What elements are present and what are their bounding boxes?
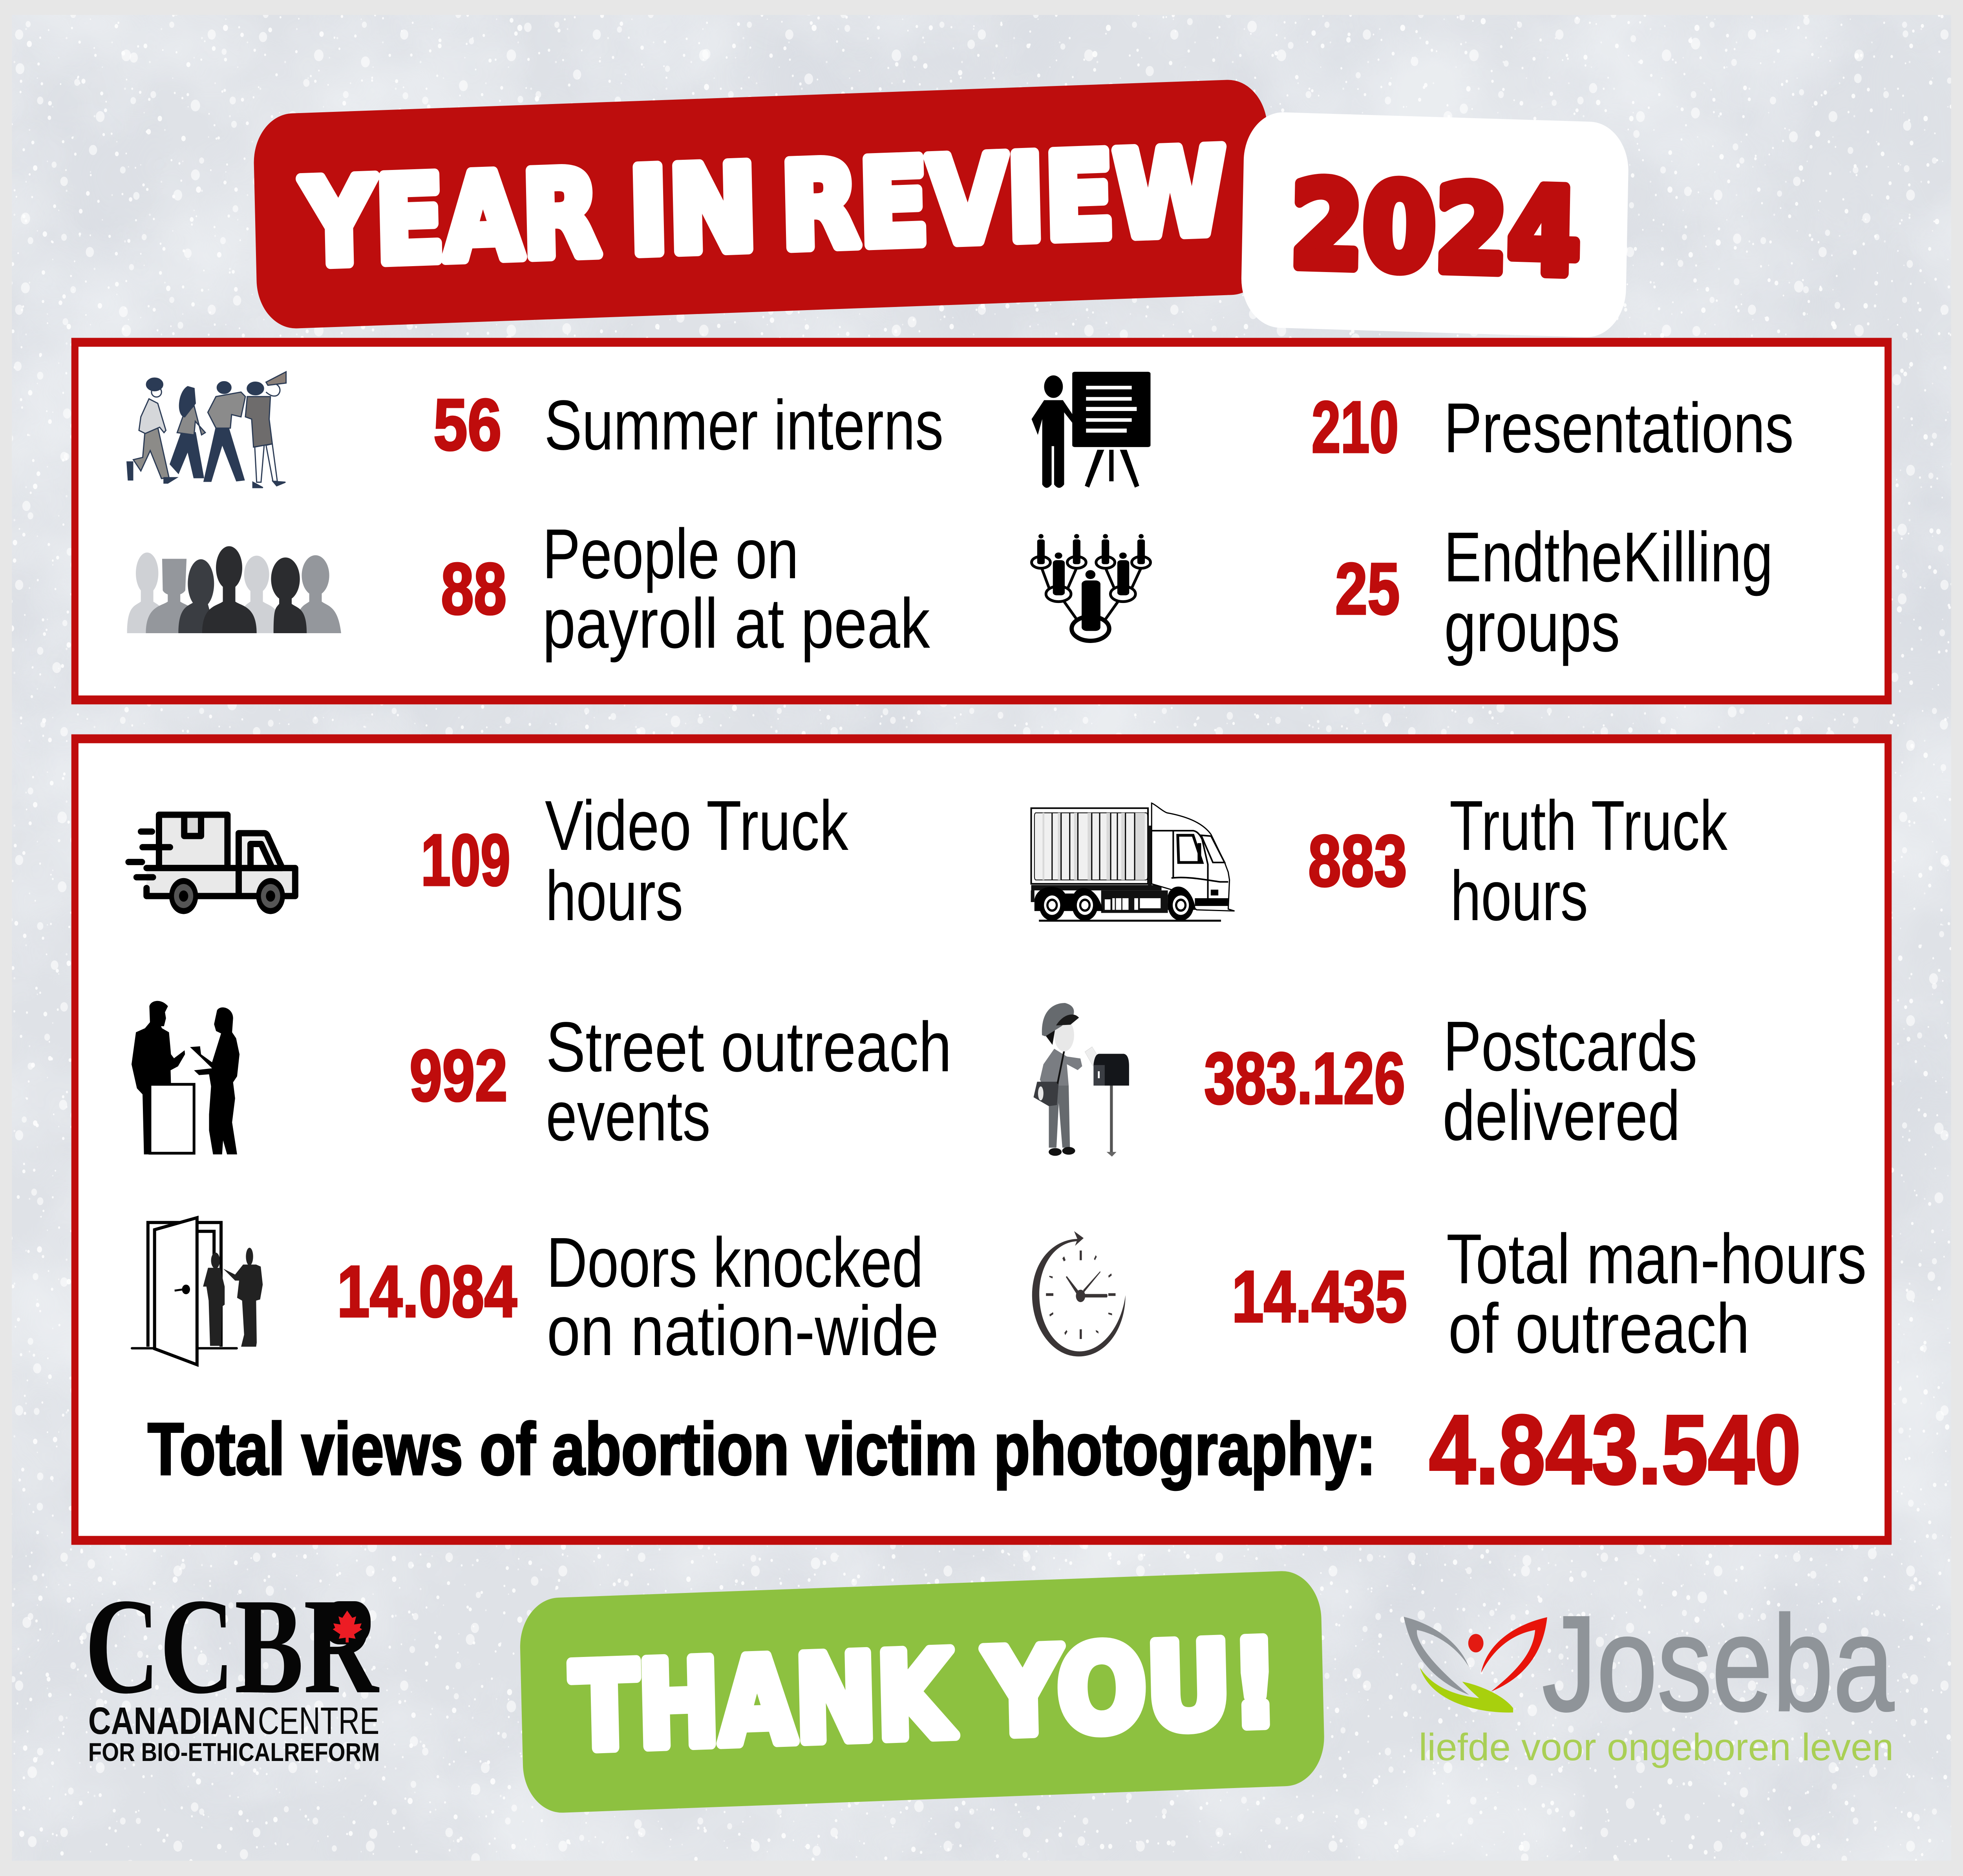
title heading: YEAR IN REVIEW: YEAR [299,145,601,293]
number: 109: 109 [421,819,510,901]
title banner: Year in Review [253,79,1271,330]
label: Postcards delivered [1442,1007,1697,1155]
number: 56: 56 [433,384,502,466]
icon: Joseba leaf mark [1404,1617,1547,1713]
heading: THANK YOU!: YOU! [982,1615,1280,1763]
button: thank you banner [519,1570,1325,1814]
label: Postcards delivered: Postcards [1443,1007,1697,1086]
label: Total man-hours of outreach: Total man-hours [1446,1219,1866,1299]
panel: staff and groups [75,342,1888,700]
label: Summer interns: Summer interns [544,385,943,465]
logo line: Canadian Centre: CENTRE [258,1699,379,1742]
number: 992: 992 [409,1035,508,1116]
logo line: for Bio-Ethical Reform: FOR BIO-ETHICALREFORM [88,1737,380,1766]
label: Truth Truck hours: Truth Truck [1449,786,1727,865]
icon: network of people [1032,534,1150,641]
label: EndtheKilling groups: EndtheKilling [1444,517,1773,597]
title heading: YEAR IN REVIEW [299,123,1228,293]
number: 4.843.540: 4.843.540 [1429,1395,1801,1504]
icon: postman at mailbox [1034,1003,1129,1156]
number: 14.435: 14.435 [1232,1256,1407,1337]
heading: THANK YOU! [570,1615,1280,1777]
label: Video Truck hours [545,786,848,935]
icon: door with two visitors [132,1218,263,1365]
label: Doors knocked on nation-wide [546,1223,939,1370]
heading: THANK YOU!: THANK [570,1627,957,1777]
logo wordmark: CCBR: CCBR [85,1570,380,1722]
label: Street outreach events: events [546,1076,711,1156]
year badge: 2024 [1241,111,1629,338]
label: Video Truck hours: Video Truck [545,786,848,865]
logo tagline: liefde voor ongeboren leven [1419,1726,1894,1768]
icon: crowd silhouettes [127,546,341,633]
title heading: YEAR IN REVIEW: IN [627,140,759,281]
icon: maple leaf in R bowl [324,1601,371,1644]
number: 883: 883 [1308,820,1407,902]
label: Street outreach events: Street outreach [546,1007,952,1087]
panel: outreach statistics [75,739,1888,1540]
label: Presentations: Presentations [1444,388,1794,468]
label: Truth Truck hours [1449,786,1727,935]
number: 383.126: 383.126 [1204,1038,1405,1119]
label: Truth Truck hours: hours [1450,856,1588,935]
icon: summer interns walking with megaphone [127,372,286,488]
icon: presenter at board [1032,372,1150,488]
label: Doors knocked on nation-wide: Doors knocked [546,1223,923,1302]
label: EndtheKilling groups [1444,517,1773,667]
label: Total man-hours of outreach [1446,1219,1866,1368]
logo wordmark: Joseba: Joseba [1542,1588,1895,1739]
label: Doors knocked on nation-wide: on nation-wide [547,1291,939,1370]
number: 88: 88 [441,548,506,630]
label: Total views of abortion victim photography: Total views of abortion victim photography: [148,1408,1376,1491]
number: 25: 25 [1335,548,1400,630]
label: People on payroll at peak: People on [543,514,799,594]
label: Street outreach events [546,1007,952,1156]
label: EndtheKilling groups: groups [1444,587,1620,667]
logo: Joseba [1404,1588,1895,1768]
logo: CCBR Canadian Centre for Bio-Ethical Reform [85,1570,380,1766]
number: 14.084: 14.084 [337,1251,517,1332]
label: People on payroll at peak [543,514,930,663]
title heading: YEAR IN REVIEW: REVIEW [779,123,1228,276]
icon: video truck [128,815,295,914]
label: Total man-hours of outreach: of outreach [1448,1289,1750,1368]
icon: clock with arrow [1032,1231,1126,1356]
logo line: Canadian Centre: CANADIAN [88,1699,256,1742]
icon: truth truck [1031,803,1235,921]
label: People on payroll at peak: payroll at peak [543,584,930,663]
year badge: 2024: 2024 [1289,157,1581,302]
label: Video Truck hours: hours [546,856,683,935]
label: Postcards delivered: delivered [1442,1076,1680,1155]
number: 210: 210 [1312,386,1398,468]
icon: two people talking at a table [132,1001,239,1154]
